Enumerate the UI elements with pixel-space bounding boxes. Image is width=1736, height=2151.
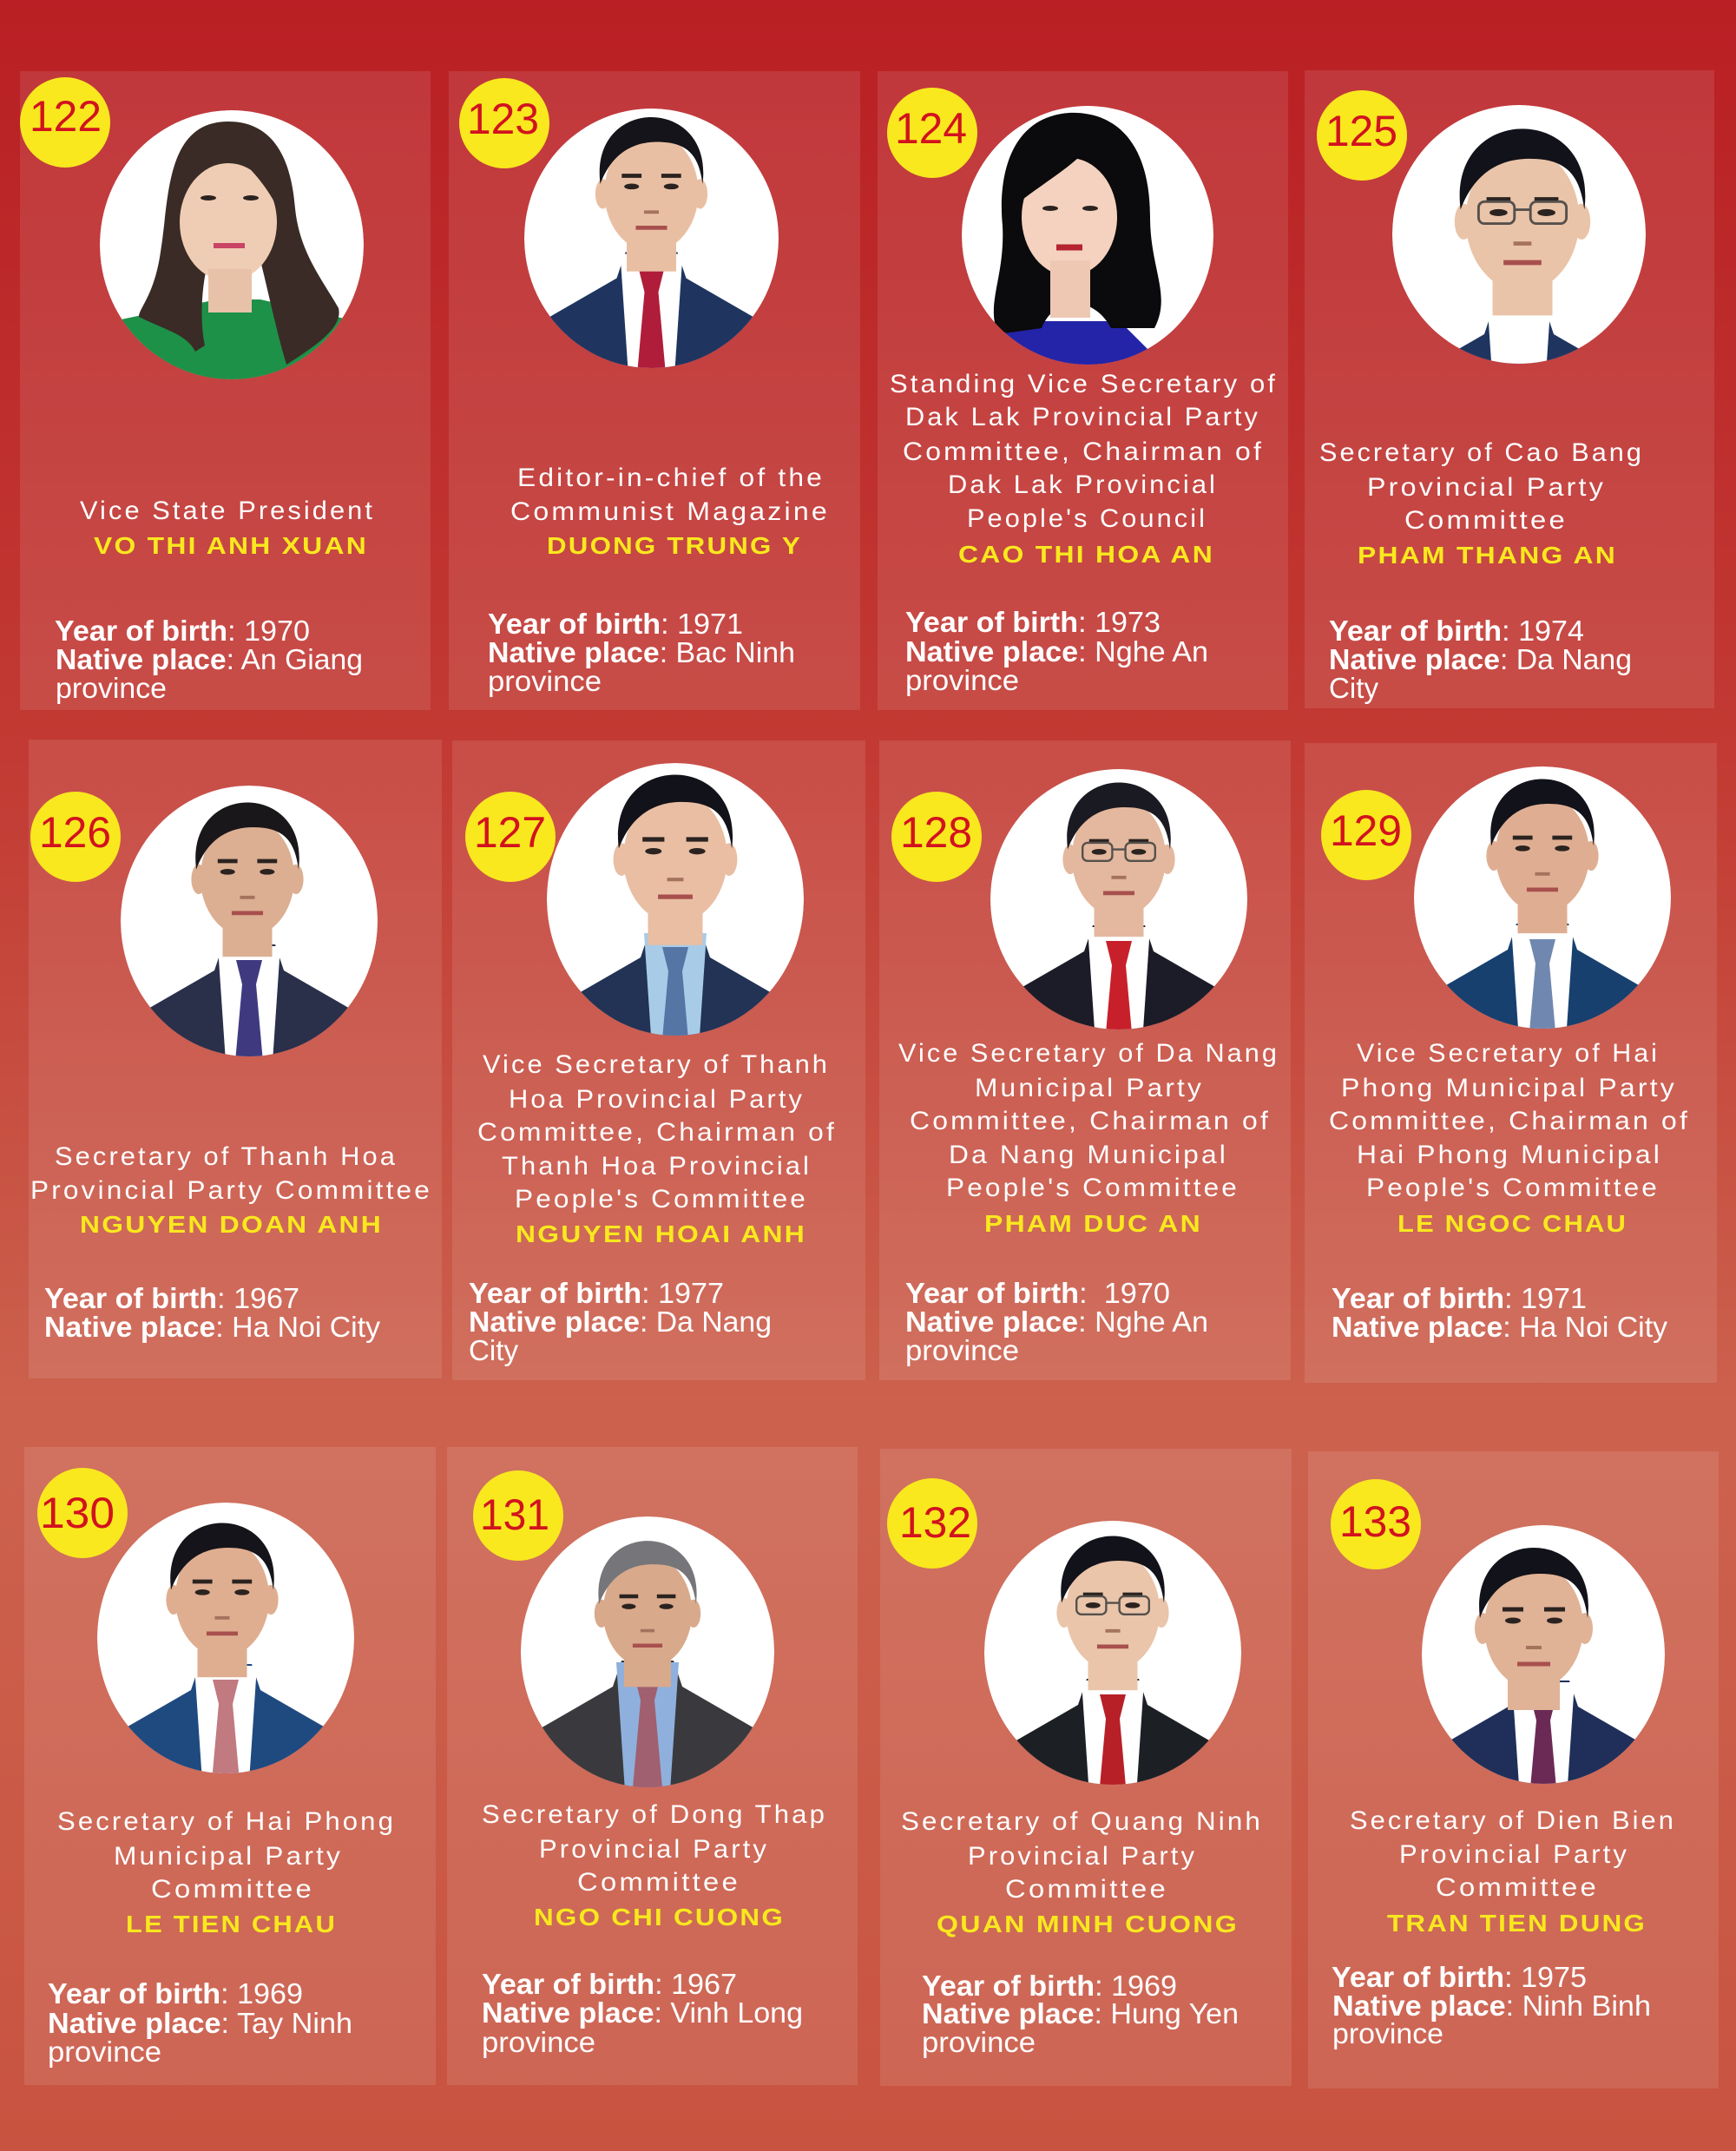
details: province xyxy=(905,1334,1019,1366)
title: Committee xyxy=(151,1875,314,1904)
name: CAO THI HOA AN xyxy=(958,541,1214,568)
title: Secretary of Thanh Hoa xyxy=(55,1142,398,1171)
title: Provincial Party xyxy=(539,1835,769,1864)
number badge: 124: 124 xyxy=(895,104,967,153)
portrait: Vo Thi Anh Xuan xyxy=(100,110,364,391)
title: Dak Lak Provincial Party xyxy=(905,403,1260,431)
details xyxy=(55,615,363,704)
details xyxy=(469,1277,772,1366)
title: Vice Secretary of Da Nang xyxy=(898,1039,1279,1068)
details: province xyxy=(56,672,167,704)
panel: member 132 xyxy=(880,1449,1292,2086)
title: Phong Municipal Party xyxy=(1341,1074,1677,1102)
panel: member 131 xyxy=(447,1447,858,2085)
title: Municipal Party xyxy=(114,1842,343,1871)
details: Native place: Ha Noi City xyxy=(1332,1311,1667,1343)
title xyxy=(482,1800,827,1897)
details: province xyxy=(482,2026,595,2058)
number badge: 128: 128 xyxy=(900,808,972,857)
details: Native place: Tay Ninh xyxy=(48,2007,352,2039)
details: province xyxy=(905,664,1019,696)
details: Year of birth: 1973 xyxy=(905,606,1161,638)
number badge: 127: 127 xyxy=(474,808,546,857)
details: Year of birth: 1971 xyxy=(1332,1282,1587,1314)
number badge: 123: 123 xyxy=(467,95,539,143)
title: Vice Secretary of Hai xyxy=(1357,1039,1660,1068)
number badge: 126 xyxy=(30,792,121,882)
details: Native place: Nghe An xyxy=(905,1306,1208,1338)
name: NGO CHI CUONG xyxy=(534,1904,785,1931)
details: Year of birth: 1969 xyxy=(922,1970,1177,2002)
details xyxy=(905,1277,1208,1366)
details xyxy=(44,1282,380,1343)
name: DUONG TRUNG Y xyxy=(547,532,802,559)
title: People's Council xyxy=(967,504,1207,533)
title: People's Committee xyxy=(946,1174,1240,1202)
name: LE NGOC CHAU xyxy=(1397,1210,1628,1237)
details: Native place: Da Nang xyxy=(469,1306,772,1338)
portrait: Pham Thang An xyxy=(1392,105,1646,364)
portrait: Cao Thi Hoa An xyxy=(962,106,1213,365)
title: Dak Lak Provincial xyxy=(948,470,1218,499)
details xyxy=(482,1968,803,2058)
details xyxy=(1329,615,1632,704)
title: Secretary of Dien Bien xyxy=(1350,1806,1676,1835)
title: Secretary of Dong Thap xyxy=(482,1800,827,1829)
details: Native place: An Giang xyxy=(56,643,363,675)
title: Provincial Party Committee xyxy=(30,1176,432,1205)
title: Committee xyxy=(577,1868,740,1897)
title: Secretary of Cao Bang xyxy=(1319,438,1644,467)
panel: member 130 xyxy=(24,1447,436,2085)
title xyxy=(1350,1806,1676,1902)
title: Da Nang Municipal xyxy=(949,1141,1228,1169)
title: Municipal Party xyxy=(975,1074,1204,1102)
title: Provincial Party xyxy=(1399,1840,1629,1869)
title: Secretary of Quang Ninh xyxy=(901,1807,1263,1836)
details: province xyxy=(48,2036,161,2068)
portrait: Pham Duc An xyxy=(990,769,1247,1029)
title xyxy=(901,1807,1263,1904)
portrait: Nguyen Hoai Anh xyxy=(547,763,804,1036)
name: QUAN MINH CUONG xyxy=(937,1911,1239,1937)
title: Hai Phong Municipal xyxy=(1357,1141,1662,1169)
title xyxy=(477,1050,837,1214)
title: People's Committee xyxy=(1366,1174,1660,1202)
title: Vice State President xyxy=(80,497,375,525)
number badge: 122: 122 xyxy=(30,92,102,141)
details: Native place: Bac Ninh xyxy=(488,636,795,668)
title xyxy=(1319,438,1644,535)
details: Year of birth: 1967 xyxy=(482,1968,737,2000)
panel: member 127 xyxy=(452,740,865,1380)
details: Year of birth: 1970 xyxy=(55,615,310,647)
details: Native place: Hung Yen xyxy=(922,1997,1239,2029)
panel: member 128 xyxy=(879,740,1291,1380)
title xyxy=(510,464,830,526)
details: province xyxy=(1332,2017,1443,2049)
details xyxy=(1332,1961,1651,2049)
panel: member 122 xyxy=(20,71,431,710)
details: Year of birth: 1969 xyxy=(48,1977,303,2010)
title xyxy=(890,370,1278,533)
number badge: 122 xyxy=(20,77,110,168)
panel: member 123 xyxy=(449,71,860,710)
details: Year of birth: 1977 xyxy=(469,1277,724,1309)
title: Committee, Chairman of xyxy=(903,437,1264,466)
title: Committee xyxy=(1436,1873,1599,1902)
details xyxy=(922,1970,1239,2058)
title: Provincial Party xyxy=(968,1842,1197,1871)
details xyxy=(1332,1282,1667,1343)
details: province xyxy=(488,665,602,697)
number badge: 131: 131 xyxy=(480,1490,549,1539)
title: Committee, Chairman of xyxy=(1329,1107,1690,1135)
number badge: 130 xyxy=(37,1468,128,1558)
number badge: 123 xyxy=(459,78,549,168)
details: Year of birth: 1975 xyxy=(1332,1961,1587,1993)
portrait: Le Ngoc Chau xyxy=(1414,766,1671,1029)
name: PHAM THANG AN xyxy=(1358,542,1617,569)
details: Year of birth: 1974 xyxy=(1329,615,1584,647)
portrait: Nguyen Doan Anh xyxy=(121,786,378,1056)
title xyxy=(1329,1039,1690,1202)
title: Committee, Chairman of xyxy=(477,1118,837,1147)
title: Standing Vice Secretary of xyxy=(890,370,1278,398)
title: Communist Magazine xyxy=(510,497,830,526)
panel: member 125 xyxy=(1305,70,1714,708)
number badge: 128 xyxy=(891,792,982,882)
number badge: 129: 129 xyxy=(1330,806,1402,855)
portrait: Duong Trung Y xyxy=(524,109,779,368)
name: NGUYEN DOAN ANH xyxy=(80,1211,383,1238)
title: Committee, Chairman of xyxy=(910,1107,1271,1135)
title: Hoa Provincial Party xyxy=(509,1085,805,1114)
title: Secretary of Hai Phong xyxy=(57,1807,396,1836)
details xyxy=(488,608,795,697)
number badge: 133 xyxy=(1331,1479,1421,1569)
title: Vice Secretary of Thanh xyxy=(483,1050,830,1079)
details: Native place: Da Nang xyxy=(1329,643,1632,675)
number badge: 132: 132 xyxy=(899,1498,971,1547)
title xyxy=(57,1807,396,1904)
details: Native place: Ha Noi City xyxy=(44,1311,380,1343)
details: City xyxy=(1329,672,1378,704)
title: Committee xyxy=(1005,1875,1168,1904)
details: Native place: Nghe An xyxy=(905,635,1208,668)
number badge: 125: 125 xyxy=(1325,107,1397,155)
panel: member 124 xyxy=(878,71,1288,710)
details: Native place: Vinh Long xyxy=(482,1996,803,2029)
title: Editor-in-chief of the xyxy=(517,464,825,492)
portrait: Tran Tien Dung xyxy=(1422,1525,1665,1784)
portrait: Quan Minh Cuong xyxy=(984,1521,1241,1785)
details: Native place: Ninh Binh xyxy=(1332,1990,1651,2022)
title: Provincial Party xyxy=(1367,473,1606,502)
name: NGUYEN HOAI ANH xyxy=(516,1220,806,1247)
details: Year of birth: 1970 xyxy=(905,1277,1170,1309)
title: People's Committee xyxy=(515,1185,808,1214)
panel: member 133 xyxy=(1308,1451,1719,2089)
portrait: Ngo Chi Cuong xyxy=(521,1516,774,1787)
name: LE TIEN CHAU xyxy=(126,1911,337,1937)
number badge: 126: 126 xyxy=(39,808,111,857)
number badge: 133: 133 xyxy=(1339,1497,1411,1546)
number badge: 129 xyxy=(1321,790,1411,880)
title: Committee xyxy=(1404,506,1568,535)
details xyxy=(48,1977,352,2068)
number badge: 124 xyxy=(887,88,977,178)
panel: member 126 xyxy=(29,740,442,1378)
name: VO THI ANH XUAN xyxy=(94,532,368,559)
details: Year of birth: 1967 xyxy=(44,1282,299,1314)
title xyxy=(898,1039,1279,1202)
panel: member 129 xyxy=(1305,743,1717,1383)
details xyxy=(905,606,1208,696)
number badge: 131 xyxy=(473,1470,563,1561)
details: City xyxy=(469,1334,518,1366)
portrait: Le Tien Chau xyxy=(97,1503,354,1773)
number badge: 125 xyxy=(1317,90,1407,181)
number badge: 132 xyxy=(887,1478,977,1569)
name: PHAM DUC AN xyxy=(984,1210,1202,1237)
details: Year of birth: 1971 xyxy=(488,608,743,640)
title xyxy=(30,1142,432,1205)
number badge: 130: 130 xyxy=(40,1489,115,1537)
number badge: 127 xyxy=(465,792,556,882)
name: TRAN TIEN DUNG xyxy=(1387,1910,1647,1937)
title: Thanh Hoa Provincial xyxy=(502,1152,812,1181)
details: province xyxy=(922,2026,1036,2058)
